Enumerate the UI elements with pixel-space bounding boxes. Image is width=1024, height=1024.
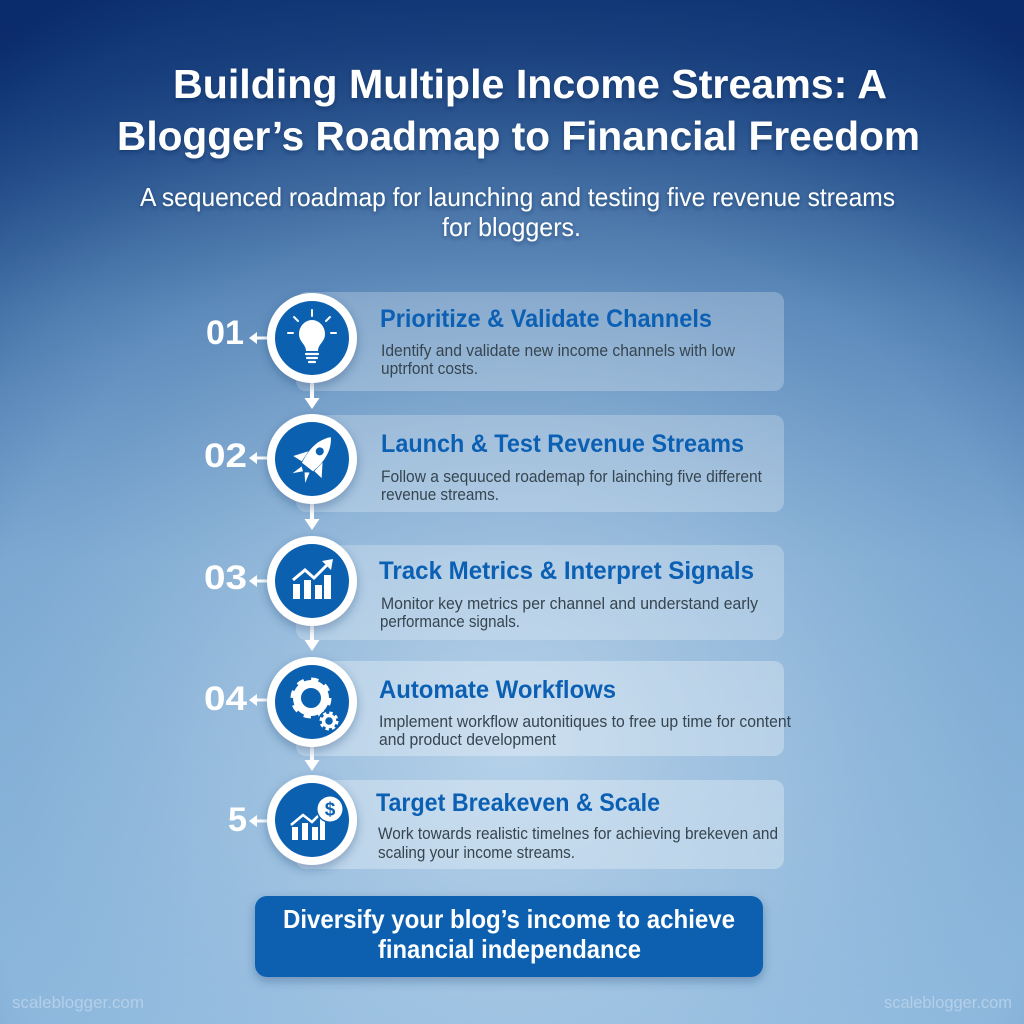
card 1 panel bbox=[296, 292, 784, 391]
callout banner bbox=[255, 896, 763, 977]
subtitle: A sequenced roadmap for launching and testing five revenue streams bbox=[140, 182, 895, 212]
step 5: target breakeven and scale bbox=[228, 775, 784, 869]
icon: gears bbox=[267, 657, 357, 747]
card 5 description: scaling your income streams. bbox=[378, 844, 575, 862]
card 2 heading: Launch & Test Revenue Streams bbox=[381, 430, 744, 458]
card 1 description: Identify and validate new income channels with low bbox=[381, 342, 735, 360]
number 5: 5 bbox=[228, 801, 247, 839]
card 4 description: and product development bbox=[379, 731, 556, 749]
arrow to number 5 bbox=[249, 815, 267, 827]
card 3 heading: Track Metrics & Interpret Signals bbox=[379, 557, 754, 585]
card 2 description: revenue streams. bbox=[381, 486, 499, 504]
card 4 panel bbox=[296, 661, 784, 756]
card 5 heading: Target Breakeven & Scale bbox=[376, 789, 660, 817]
card 5 panel bbox=[296, 780, 784, 869]
number 02: 02 bbox=[204, 437, 247, 475]
card 1 description: uptrfont costs. bbox=[381, 360, 478, 378]
card 5 description bbox=[378, 825, 778, 862]
arrow down to step 5 bbox=[304, 742, 320, 771]
card 5 description: Work towards realistic timelnes for achieving brekeven and bbox=[378, 825, 778, 843]
title bbox=[117, 61, 920, 159]
number 04: 04 bbox=[204, 680, 247, 718]
arrow to number 03 bbox=[249, 575, 267, 587]
card 3 description bbox=[380, 595, 759, 631]
number 03: 03 bbox=[204, 559, 247, 597]
arrow to number 01 bbox=[249, 332, 267, 344]
icon: light bulb bbox=[267, 293, 357, 383]
callout text: Diversify your blog’s income to achieve bbox=[283, 904, 735, 934]
subtitle: for bloggers. bbox=[442, 212, 581, 242]
icon: rocket bbox=[267, 414, 357, 504]
arrow down to step 3 bbox=[304, 500, 320, 530]
card 2 description: Follow a sequuced roademap for lainching five different bbox=[381, 468, 762, 486]
step 2: launch and test revenue streams bbox=[204, 414, 784, 530]
callout text: financial independance bbox=[378, 934, 641, 964]
step 4: automate workflows bbox=[204, 657, 791, 771]
arrow to number 04 bbox=[249, 694, 267, 706]
card 2 description bbox=[381, 468, 762, 504]
arrow down to step 4 bbox=[304, 622, 320, 651]
card 3 description: performance signals. bbox=[380, 613, 520, 631]
icon: chart with dollar coin bbox=[267, 775, 357, 865]
title: Building Multiple Income Streams: A bbox=[173, 61, 887, 107]
card 1 description bbox=[381, 342, 735, 378]
arrow to number 02 bbox=[249, 452, 267, 464]
card 4 description: Implement workflow autonitiques to free up time for content bbox=[379, 713, 791, 731]
title: Blogger’s Roadmap to Financial Freedom bbox=[117, 113, 920, 159]
card 4 heading: Automate Workflows bbox=[379, 676, 616, 704]
icon: chart with dollar coin: $ bbox=[325, 800, 336, 820]
watermark right: scaleblogger.com bbox=[884, 993, 1012, 1012]
subtitle bbox=[140, 182, 895, 242]
card 4 description bbox=[379, 713, 791, 749]
card 3 panel bbox=[296, 545, 784, 640]
number 01: 01 bbox=[206, 314, 244, 352]
card 3 description: Monitor key metrics per channel and understand early bbox=[381, 595, 759, 613]
card 2 panel bbox=[296, 415, 784, 512]
step 1: prioritize and validate channels bbox=[206, 292, 784, 409]
arrow down to step 2 bbox=[304, 380, 320, 409]
callout text bbox=[283, 904, 735, 964]
card 1 heading: Prioritize & Validate Channels bbox=[380, 305, 712, 333]
step 3: track metrics and interpret signals bbox=[204, 536, 784, 651]
watermark left: scaleblogger.com bbox=[12, 993, 144, 1012]
icon: rising bar chart bbox=[267, 536, 357, 626]
